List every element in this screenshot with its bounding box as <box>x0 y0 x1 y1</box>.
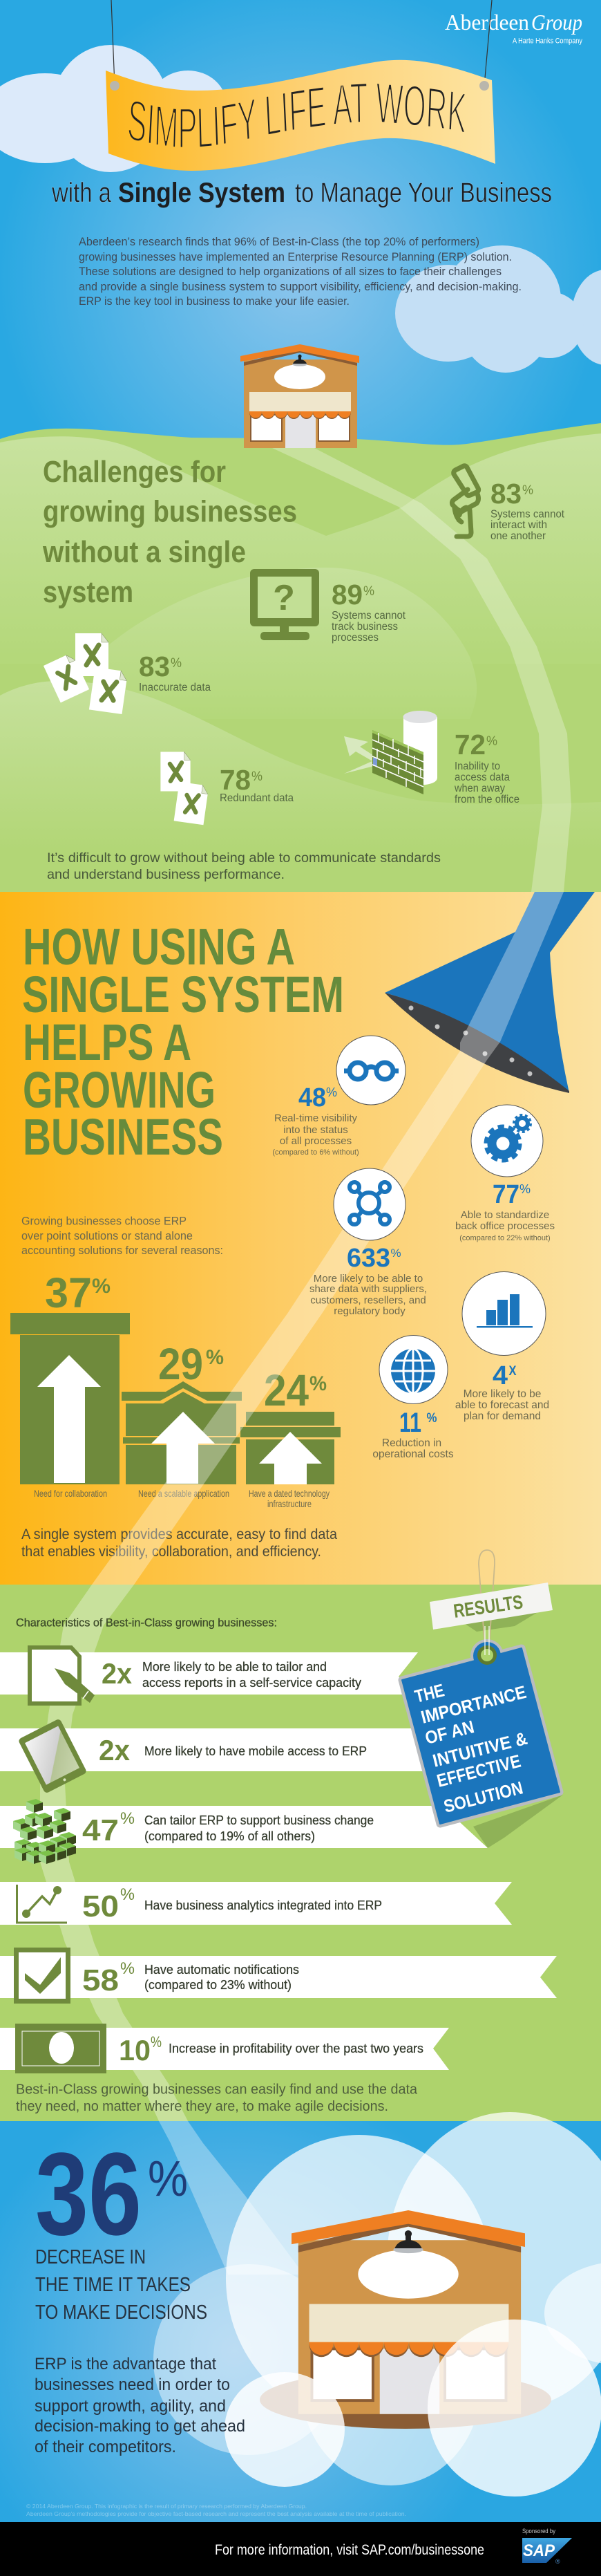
benefit: 11% reduction in costs: operational costs <box>372 1448 454 1460</box>
benefit: 77% standardize: 77 <box>493 1180 519 1209</box>
tag: the importance of an intuitive and effective solution: IMPORTANCE <box>419 1681 528 1728</box>
benefit: 11% reduction in costs: % <box>427 1411 437 1426</box>
benefit: 11% reduction in costs: 11 <box>399 1408 421 1438</box>
row: automatic notifications: % <box>120 1959 135 1978</box>
stat: 83% inaccurate data: 83 <box>139 651 170 682</box>
text: results conclusion <box>16 2082 418 2114</box>
icon: network nodes <box>350 1182 390 1224</box>
text: ERP advantage: support growth, agility, and <box>35 2397 226 2416</box>
heading: how using a single system: GROWING <box>23 1061 216 1119</box>
heading: characteristics: Characteristics of Best-in-Class growing businesses: <box>16 1616 277 1629</box>
stat: 83% systems cannot interact: Systems cannot <box>490 509 565 520</box>
stat: 89% cannot track: % <box>363 584 374 599</box>
stat: 78% redundant data <box>220 764 294 804</box>
stat: 89% cannot track: 89 <box>332 579 363 610</box>
bar: 29% scalable <box>122 1339 242 1499</box>
icon: monitor with question mark <box>250 569 319 640</box>
row: business analytics: Have business analytics integrated into ERP <box>144 1898 382 1912</box>
bar: 24% dated technology: 24 <box>264 1365 309 1415</box>
bar: 37% collaboration <box>10 1269 130 1499</box>
icon: small storefront <box>240 344 359 448</box>
banner: Simplify Life at Work <box>106 0 495 171</box>
text: why choose ERP: over point solutions or stand alone <box>21 1229 193 1242</box>
benefit: 4x forecast: able to forecast and <box>455 1399 549 1411</box>
bar: 24% dated technology: infrastructure <box>267 1498 312 1509</box>
bar: 24% dated technology: % <box>309 1372 327 1395</box>
stat: 72% access data <box>454 729 519 805</box>
stat: 83% systems cannot interact: 83 <box>490 478 522 510</box>
text: copyright: Aberdeen Group’s methodologies provide for objective fact-based research and represent the best analysis available at the time of publication. <box>26 2510 406 2517</box>
heading: how using a single system: SINGLE SYSTEM <box>22 966 344 1023</box>
tag: the importance of an intuitive and effective solution: SOLUTION <box>441 1777 525 1817</box>
stat: 89% cannot track: processes <box>332 632 379 644</box>
bar chart: reasons for ERP <box>10 1269 341 1509</box>
tag: the importance of an intuitive and effective solution: OF AN <box>423 1716 476 1748</box>
text: ERP advantage <box>35 2355 245 2456</box>
benefit: 633% share data: 633 <box>347 1244 390 1273</box>
heading: challenges: without a single <box>42 535 246 569</box>
row: mobile access: 2x <box>99 1734 131 1766</box>
row: mobile access <box>0 1718 428 1794</box>
stat: 83% inaccurate data: Inaccurate data <box>139 682 211 693</box>
icon: bar chart <box>477 1294 533 1327</box>
row: automatic notifications: 58 <box>82 1963 119 1997</box>
panel: results background <box>0 1585 601 2121</box>
logo: Aberdeen Group: A Harte Hanks Company <box>513 37 582 46</box>
text: why choose ERP: accounting solutions for several reasons: <box>21 1244 223 1257</box>
logo: Aberdeen Group: Group <box>531 10 582 35</box>
icon: line chart <box>17 1885 67 1923</box>
footer bar: Sponsored by <box>522 2528 555 2535</box>
stat: 72% access data: % <box>486 734 497 749</box>
benefit: 48% real-time visibility: (compared to 6% without) <box>272 1148 359 1157</box>
stat: 83% systems cannot interact: interact with <box>490 519 547 531</box>
panel: challenges <box>0 344 601 892</box>
row: profitability <box>0 2024 449 2073</box>
benefit: 77% standardize: back office processes <box>455 1220 555 1232</box>
logo: SAP: SAP <box>523 2541 555 2560</box>
intro paragraph <box>79 236 522 308</box>
tag: the importance of an intuitive and effective solution <box>402 1550 563 1848</box>
benefit: 633% share data <box>309 1168 427 1317</box>
subtitle <box>51 178 552 208</box>
stat: 83% inaccurate data: % <box>171 656 182 671</box>
icon: document and pen <box>30 1648 95 1704</box>
tag: the importance of an intuitive and effective solution: THE <box>412 1679 446 1707</box>
heading: how using a single system <box>22 918 344 1166</box>
text: copyright: © 2014 Aberdeen Group. This infographic is the result of primary research performed by Aberdeen Group. <box>26 2503 307 2510</box>
heading: challenges: Challenges for <box>43 455 226 489</box>
intro paragraph: growing businesses have implemented an Enterprise Resource Planning (ERP) solution. <box>79 251 512 263</box>
tag: the importance of an intuitive and effective solution: EFFECTIVE <box>435 1751 523 1791</box>
heading: challenges <box>42 455 297 609</box>
text: ERP advantage: ERP is the advantage that <box>35 2355 216 2373</box>
heading: how using a single system: HELPS A <box>23 1014 191 1071</box>
benefit: 77% standardize: % <box>519 1182 531 1196</box>
icon: ground shadow <box>260 2371 551 2429</box>
text: challenges conclusion: It’s difficult to grow without being able to communicate standards <box>47 850 441 866</box>
benefit: 4x forecast: X <box>508 1364 517 1379</box>
benefit: 48% real-time visibility: Real-time visibility <box>274 1112 358 1124</box>
intro paragraph: and provide a single business system to support visibility, efficiency, and decision-making. <box>79 281 522 293</box>
benefit: 48% real-time visibility: 48 <box>298 1083 326 1112</box>
benefit: 633% share data: regulatory body <box>334 1305 406 1317</box>
tag: the importance of an intuitive and effective solution: RESULTS <box>452 1591 524 1622</box>
subtitle: to Manage Your Business <box>295 178 552 208</box>
stat: 72% access data: when away <box>454 783 505 794</box>
row: tailor ERP: % <box>120 1809 135 1828</box>
text: why choose ERP: Growing businesses choose ERP <box>21 1214 187 1228</box>
cloud: right <box>395 245 601 373</box>
bar: 29% scalable: % <box>206 1346 224 1369</box>
row: business analytics <box>0 1882 512 1925</box>
stat: 78% redundant data: 78 <box>220 764 251 796</box>
bar: 24% dated technology: Have a dated technology <box>249 1488 330 1499</box>
icon: gears <box>486 1115 531 1160</box>
benefit: 48% real-time visibility: into the status <box>283 1124 348 1136</box>
text: single system conclusion: A single system provides accurate, easy to find data <box>21 1527 337 1542</box>
stat: 36%: 36 <box>35 2129 142 2260</box>
icon: banknote <box>15 2024 106 2073</box>
row: business analytics: % <box>120 1885 135 1904</box>
text: challenges conclusion: and understand business performance. <box>47 867 285 882</box>
benefit: 4x forecast: 4 <box>493 1361 508 1390</box>
row: tailor ERP <box>0 1799 488 1864</box>
bar: 37% collaboration: 37 <box>45 1269 92 1316</box>
benefit: 77% standardize: Able to standardize <box>461 1209 549 1221</box>
intro paragraph: Aberdeen’s research finds that 96% of Best-in-Class (the top 20% of performers) <box>79 236 479 248</box>
row: automatic notifications: Have automatic notifications <box>144 1963 299 1977</box>
text: challenges conclusion <box>47 850 441 882</box>
row: self-service reports <box>0 1648 418 1704</box>
text: single system conclusion: that enables visibility, collaboration, and efficiency. <box>21 1544 321 1560</box>
text: why choose ERP <box>21 1214 223 1257</box>
row: self-service reports: access reports in a self-service capacity <box>142 1676 361 1690</box>
stat: 89% cannot track: track business <box>332 621 398 633</box>
icon: check box <box>17 1950 68 2001</box>
bar: 37% collaboration: % <box>92 1275 111 1298</box>
benefit: 48% real-time visibility: of all processes <box>280 1135 352 1147</box>
text: decrease in time <box>35 2246 207 2324</box>
text: results conclusion: Best-in-Class growing businesses can easily find and use the data <box>16 2082 418 2098</box>
text: decrease in time: THE TIME IT TAKES <box>35 2274 191 2296</box>
stat: 72% access data: from the office <box>455 794 519 805</box>
row: profitability: 10 <box>119 2034 151 2066</box>
bar: 29% scalable: 29 <box>158 1339 203 1389</box>
stat: 83% systems cannot interact <box>490 478 565 542</box>
icon: funnel spotlight <box>385 892 595 1093</box>
benefit: 11% reduction in costs <box>372 1336 454 1460</box>
row: profitability: Increase in profitability over the past two years <box>169 2042 423 2055</box>
subtitle: with a <box>51 178 112 208</box>
stat: 72% access data: 72 <box>455 729 486 760</box>
row: automatic notifications: (compared to 23% without) <box>144 1978 292 1992</box>
text: results conclusion: they need, no matter where they are, to make agile decisions. <box>16 2099 388 2114</box>
stat: 89% cannot track <box>332 579 406 644</box>
row: mobile access: More likely to have mobile access to ERP <box>144 1744 367 1758</box>
stat: 36%: % <box>148 2152 188 2207</box>
logo: SAP <box>522 2538 572 2565</box>
row: tailor ERP: Can tailor ERP to support business change <box>144 1813 374 1827</box>
icon: monitor with question mark: ? <box>273 578 295 618</box>
benefit: 633% share data: customers, resellers, and <box>310 1294 426 1307</box>
icon: green cubes <box>13 1799 76 1864</box>
text: decrease in time: DECREASE IN <box>35 2246 146 2268</box>
benefit: 633% share data: share data with suppliers, <box>309 1283 427 1295</box>
benefit: 11% reduction in costs: Reduction in <box>382 1437 441 1449</box>
benefit: 633% share data: More likely to be able to <box>314 1273 423 1285</box>
icon: globe <box>391 1349 435 1393</box>
bar: 37% collaboration: Need for collaboration <box>34 1488 107 1499</box>
stat: 72% access data: access data <box>455 772 510 783</box>
panel: sky header <box>0 0 601 445</box>
subtitle: Single System <box>118 178 285 208</box>
stat: 83% systems cannot interact: % <box>522 483 533 498</box>
heading: how using a single system: BUSINESS <box>23 1108 223 1166</box>
row: self-service reports: 2x <box>102 1657 133 1690</box>
text: copyright <box>26 2503 406 2517</box>
banner: Simplify Life at Work: SIMPLIFY LIFE AT WORK <box>128 84 465 147</box>
panel: closing clouds and store <box>153 2112 601 2496</box>
benefit: 4x forecast: plan for demand <box>464 1410 541 1422</box>
benefit: 48% real-time visibility: % <box>326 1085 337 1099</box>
footer bar <box>0 2522 601 2576</box>
icon: large storefront <box>292 2210 525 2414</box>
benefit: 48% real-time visibility <box>272 1036 406 1157</box>
icon: redundant documents <box>160 752 209 825</box>
icon: broken chain <box>452 466 479 536</box>
bar: 29% scalable: Need a scalable application <box>138 1488 229 1499</box>
footer bar: For more information, visit SAP.com/businessone <box>215 2542 484 2558</box>
icon: tablet <box>18 1718 87 1794</box>
stat: 83% inaccurate data <box>139 651 211 693</box>
stat: 72% access data: Inability to <box>455 760 500 772</box>
logo: SAP: ® <box>555 2558 560 2565</box>
panel: how a single system helps <box>0 892 601 1585</box>
icon: glasses <box>344 1063 399 1079</box>
benefit: 633% share data: % <box>390 1247 401 1260</box>
stat: 83% systems cannot interact: one another <box>490 530 546 542</box>
heading: challenges: system <box>43 575 133 609</box>
benefit: 4x forecast <box>455 1272 549 1422</box>
intro paragraph: ERP is the key tool in business to make your life easier. <box>79 295 350 308</box>
stat: 89% cannot track: Systems cannot <box>332 610 406 622</box>
stat: 78% redundant data: % <box>251 769 263 784</box>
benefit: 77% standardize: (compared to 22% without) <box>459 1234 551 1242</box>
icon: firewall and database <box>344 711 437 794</box>
row: tailor ERP: 47 <box>82 1813 119 1847</box>
icon: inaccurate documents <box>44 633 128 714</box>
cloud: upper left <box>0 45 227 172</box>
benefit: 4x forecast: More likely to be <box>464 1388 541 1400</box>
text: ERP advantage: decision-making to get ahead <box>35 2417 245 2436</box>
row: self-service reports: More likely to be able to tailor and <box>142 1660 327 1674</box>
text: ERP advantage: businesses need in order to <box>35 2376 230 2394</box>
row: automatic notifications <box>0 1950 557 2001</box>
intro paragraph: These solutions are designed to help organizations of all sizes to face their challenges <box>79 265 502 278</box>
heading: challenges: growing businesses <box>43 495 297 528</box>
light beam from funnel <box>40 892 564 2275</box>
stat: 78% redundant data: Redundant data <box>220 792 294 804</box>
benefit: 77% standardize <box>455 1105 555 1242</box>
row: business analytics: 50 <box>82 1889 119 1923</box>
text: decrease in time: TO MAKE DECISIONS <box>35 2302 207 2324</box>
row: profitability: % <box>151 2033 162 2051</box>
logo: Aberdeen Group: Aberdeen <box>445 10 529 35</box>
text: single system conclusion <box>21 1527 337 1560</box>
row: tailor ERP: (compared to 19% of all others) <box>144 1829 315 1843</box>
tag: the importance of an intuitive and effective solution: INTUITIVE & <box>430 1728 529 1771</box>
panel: closing sky background <box>0 2121 601 2522</box>
bar: 24% dated technology <box>240 1365 341 1509</box>
panel: characteristics <box>0 1616 557 2114</box>
heading: how using a single system: HOW USING A <box>23 918 295 976</box>
text: ERP advantage: of their competitors. <box>35 2438 176 2456</box>
logo: Aberdeen Group <box>445 10 582 46</box>
